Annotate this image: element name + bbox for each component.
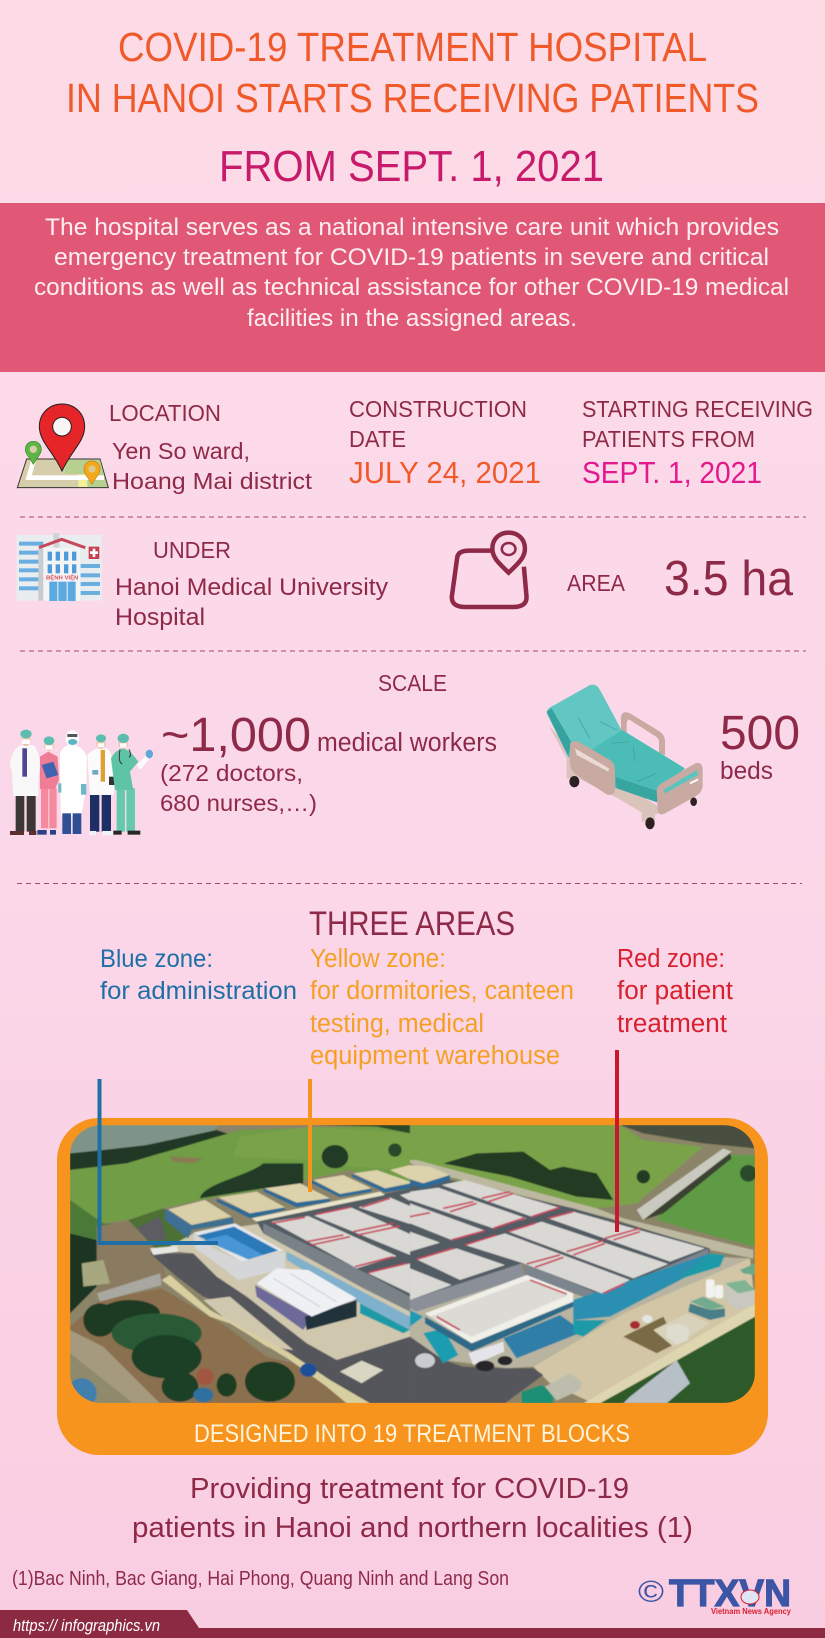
workers text: ~1,000 — [161, 709, 311, 762]
pointer: blue zone — [100, 1079, 218, 1243]
construction date: JULY 24, 2021 — [349, 455, 541, 490]
logo: TTXVN: TTXVN — [669, 1573, 791, 1615]
closing statement: patients in Hanoi and northern localities (1) — [132, 1512, 693, 1544]
workers text: (272 doctors, — [160, 760, 303, 786]
photo: aerial view of hospital — [67, 1125, 757, 1408]
workers text: 680 nurses,…) — [160, 790, 317, 816]
yellow zone label: Yellow zone: — [310, 945, 446, 973]
beds text: beds — [720, 757, 773, 785]
intro band: emergency treatment for COVID-19 patients in severe and critical — [54, 244, 769, 271]
intro band — [0, 203, 825, 372]
yellow zone label — [310, 945, 574, 1070]
yellow zone label: for dormitories, canteen — [310, 977, 574, 1005]
location text: LOCATION — [109, 400, 221, 426]
title: COVID-19 TREATMENT HOSPITAL — [118, 24, 707, 70]
beds text — [720, 707, 800, 785]
under text: Hanoi Medical University — [115, 574, 388, 601]
intro band: conditions as well as technical assistance for other COVID-19 medical — [34, 274, 789, 301]
icon: map pin — [17, 404, 108, 488]
icon: medical workers — [10, 730, 153, 835]
construction date: DATE — [349, 426, 406, 452]
icon: area — [452, 533, 527, 607]
workers text: medical workers — [317, 729, 497, 757]
intro band: The hospital serves as a national intensive care unit which provides — [45, 214, 779, 241]
icon: hospital bed — [547, 685, 703, 829]
starting date: PATIENTS FROM — [582, 426, 755, 452]
scale heading: SCALE — [378, 670, 447, 696]
area value: 3.5 ha — [664, 552, 794, 606]
area value — [567, 552, 794, 606]
blue zone label — [100, 945, 297, 1005]
yellow zone label: equipment warehouse — [310, 1042, 560, 1070]
title — [66, 24, 759, 121]
workers text — [160, 709, 497, 816]
icon: hospital — [17, 533, 102, 601]
under text — [115, 537, 388, 631]
under text: UNDER — [153, 537, 231, 563]
footnote: (1)Bac Ninh, Bac Giang, Hai Phong, Quang Ninh and Lang Son — [12, 1568, 509, 1590]
subtitle date: FROM SEPT. 1, 2021 — [219, 142, 604, 191]
beds text: 500 — [720, 707, 800, 760]
tan dormitory blocks — [165, 1165, 410, 1333]
yellow zone label: testing, medical — [310, 1010, 484, 1038]
closing statement: Providing treatment for COVID-19 — [190, 1473, 629, 1505]
location text: Hoang Mai district — [112, 468, 313, 494]
red zone label — [617, 945, 733, 1038]
blue zone label: Blue zone: — [100, 945, 213, 973]
pointer: red zone — [615, 1050, 619, 1232]
logo: TTXVN: Vietnam News Agency — [711, 1607, 792, 1616]
location text — [109, 400, 313, 494]
logo: TTXVN: © — [638, 1574, 664, 1609]
intro band: facilities in the assigned areas. — [247, 305, 577, 332]
blue zone label: for administration — [100, 977, 297, 1005]
area value: AREA — [567, 570, 626, 596]
main white roofs and front building — [410, 1180, 755, 1403]
pointer: yellow zone — [308, 1079, 312, 1192]
starting date: STARTING RECEIVING — [582, 396, 813, 422]
under text: Hospital — [115, 604, 205, 631]
footer bar: https:// infographics.vn — [13, 1616, 160, 1635]
panel caption: DESIGNED INTO 19 TREATMENT BLOCKS — [194, 1420, 630, 1448]
panel: orange photo frame — [57, 1118, 768, 1455]
red zone label: treatment — [617, 1010, 727, 1038]
three areas heading: THREE AREAS — [309, 905, 515, 943]
construction date — [349, 396, 541, 490]
red zone label: for patient — [617, 977, 733, 1005]
construction date: CONSTRUCTION — [349, 396, 527, 422]
starting date: SEPT. 1, 2021 — [582, 455, 762, 490]
icon: hospital: BỆNH VIỆN — [46, 574, 78, 582]
location text: Yen So ward, — [112, 438, 250, 464]
red zone label: Red zone: — [617, 945, 725, 973]
footer bar — [0, 1610, 825, 1638]
starting date — [582, 396, 813, 490]
closing statement — [132, 1473, 693, 1544]
